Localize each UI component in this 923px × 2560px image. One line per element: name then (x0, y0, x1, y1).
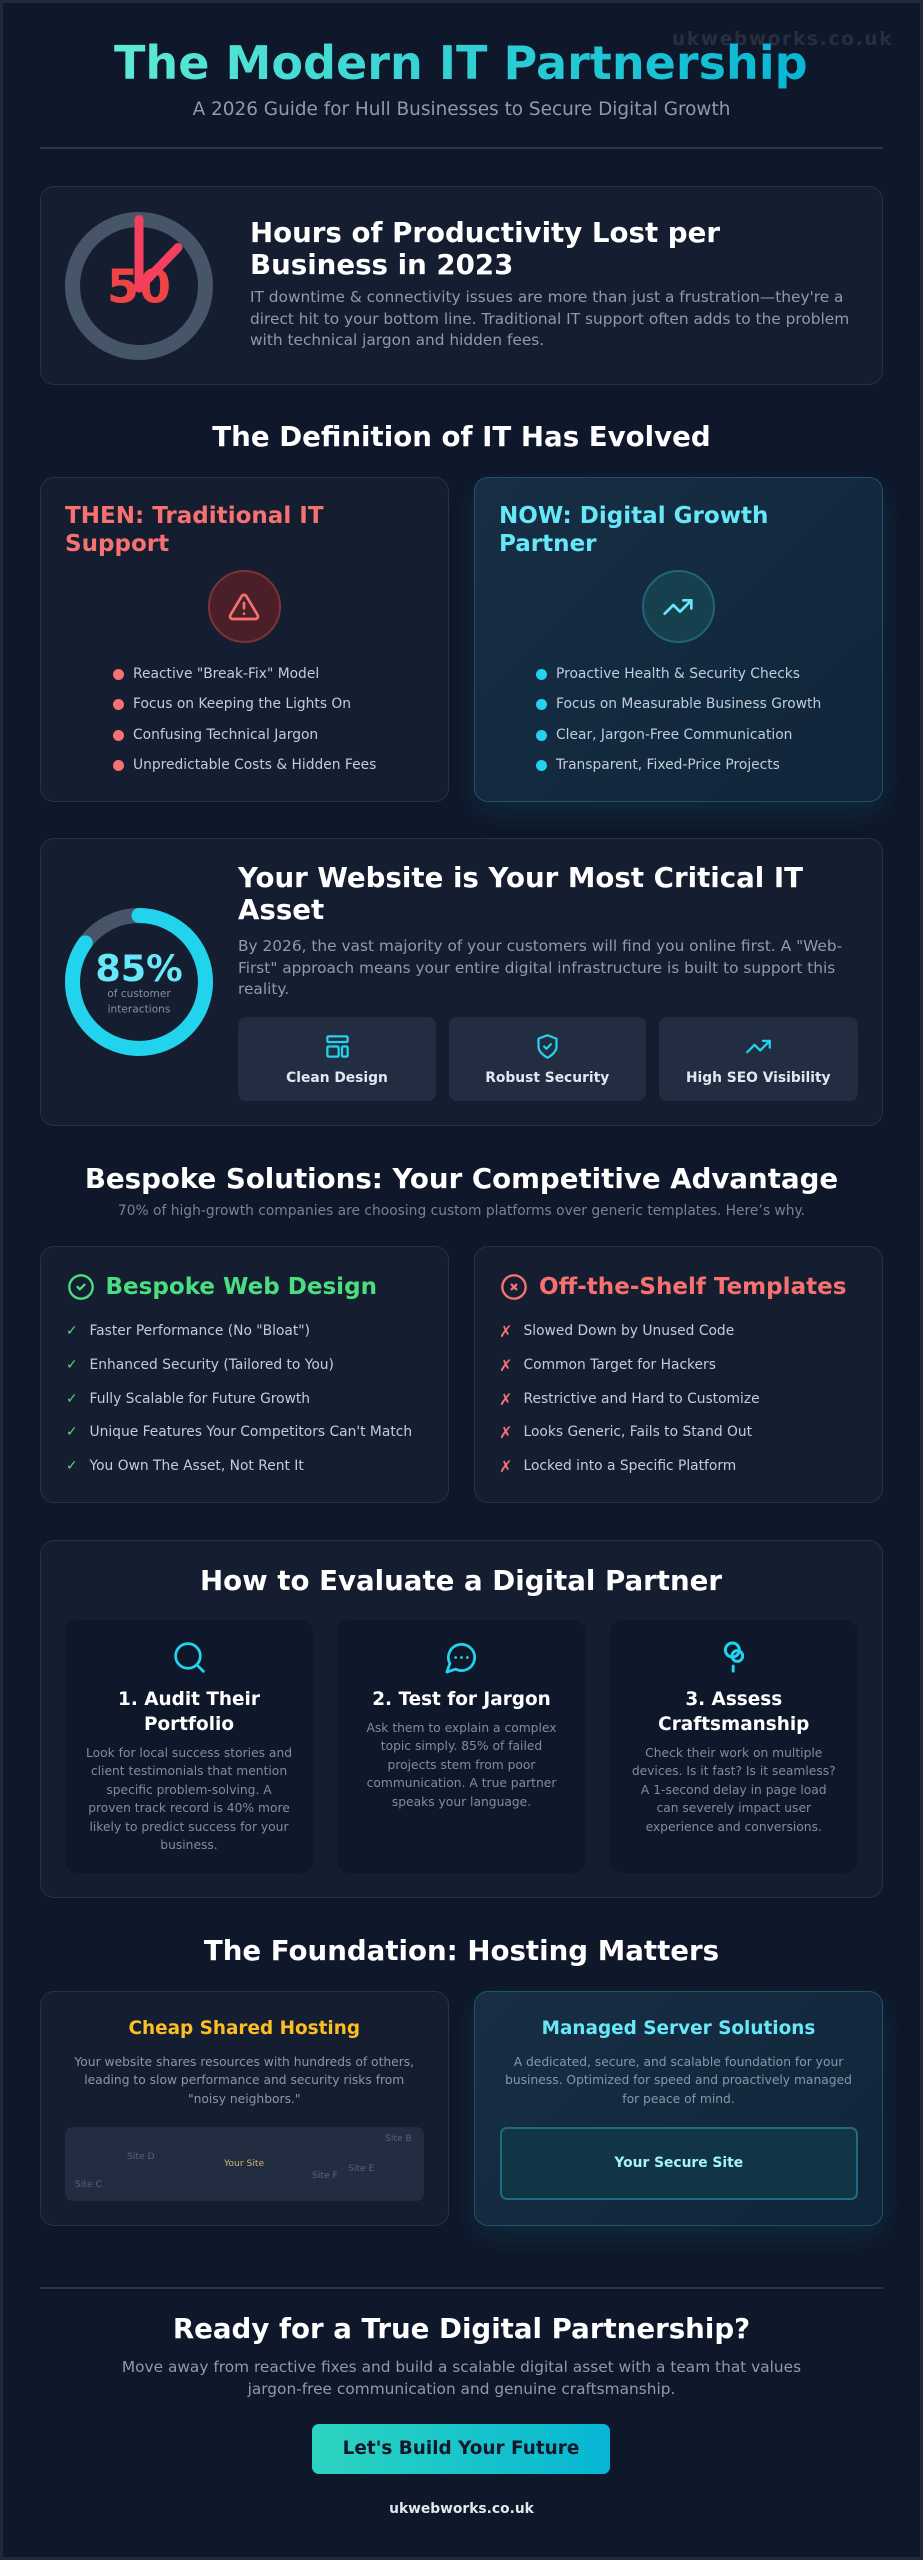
donut chart: 85%: interactions (108, 1004, 170, 1016)
list: benefits: ✓ (66, 1458, 78, 1474)
step 1: audit (65, 1620, 313, 1873)
step 3: craftsmanship: 3. Assess (685, 1689, 782, 1710)
diagram: secure site (500, 2127, 858, 2200)
panel heading (65, 503, 324, 557)
donut chart: 85% (65, 908, 213, 1056)
text block: By 2026, the vast majority of your customers will find you online first. A "Web- (238, 937, 842, 955)
diagram: shared server: Site D (127, 2151, 155, 2162)
button: Let's Build Your Future (343, 2438, 579, 2459)
panel heading: Cheap Shared Hosting (128, 2018, 360, 2039)
icon: x circle (501, 1274, 527, 1300)
heading: Business in 2023 (250, 248, 513, 280)
panel heading: Partner (499, 531, 597, 557)
panel: managed server (474, 1991, 883, 2226)
step 3: craftsmanship: A 1-second delay in page load (641, 1783, 827, 1797)
list: now: Focus on Measurable Business Growth (556, 696, 821, 712)
feature: SEO visibility: High SEO Visibility (686, 1070, 831, 1086)
panel heading: Bespoke Web Design (106, 1274, 377, 1300)
text block: call to action: jargon-free communication and genuine craftsmanship. (248, 2380, 675, 2398)
list: benefits: Enhanced Security (Tailored to You) (90, 1357, 334, 1373)
panel: now (474, 477, 883, 802)
diagram: shared server: Site E (348, 2163, 374, 2174)
step 3: craftsmanship: experience and conversions. (646, 1820, 822, 1834)
list: now: Transparent, Fixed-Price Projects (556, 757, 780, 773)
panel heading: Off-the-Shelf Templates (539, 1274, 846, 1300)
step 2: jargon: communication. A true partner (367, 1776, 556, 1790)
heading: definition: The Definition of IT Has Evolved (212, 420, 711, 452)
heading: call to action: Ready for a True Digital Partnership? (173, 2312, 750, 2345)
list: now (536, 666, 821, 773)
list: drawbacks: Locked into a Specific Platform (524, 1458, 736, 1474)
step 1: audit: client testimonials that mention (91, 1764, 287, 1778)
heading (238, 861, 803, 926)
text block (250, 288, 849, 349)
panel: website asset (40, 838, 883, 1126)
icon: trending up (642, 570, 714, 643)
feature: clean design (238, 1017, 436, 1101)
panel: evaluate partner (40, 1540, 883, 1898)
panel heading: How to Evaluate a Digital Partner (200, 1564, 722, 1597)
list: drawbacks: ✗ (499, 1356, 512, 1375)
list: drawbacks: ✗ (499, 1390, 512, 1409)
list: then: Reactive "Break-Fix" Model (133, 666, 319, 682)
text block (74, 2055, 414, 2106)
text block: with technical jargon and hidden fees. (250, 331, 544, 349)
step 1: audit: business. (160, 1838, 218, 1852)
panel: hours lost (40, 186, 883, 385)
text block: IT downtime & connectivity issues are more than just a frustration—they're a (250, 288, 843, 306)
list: drawbacks: ✗ (499, 1423, 512, 1442)
step 2: jargon: topic simply. 85% of failed (381, 1739, 542, 1753)
gauge: 50 hours clock (65, 212, 213, 360)
list: benefits (66, 1323, 412, 1474)
text block: "noisy neighbors." (188, 2092, 301, 2106)
donut chart: 85%: of customer (107, 988, 171, 1000)
text block: First" approach means your entire digital infrastructure is built to support this (238, 959, 835, 977)
list: benefits: ✓ (66, 1391, 78, 1407)
heading: bespoke: Bespoke Solutions: Your Competitive Advantage (85, 1162, 838, 1194)
feature: SEO visibility (659, 1017, 858, 1101)
heading: Hours of Productivity Lost per (250, 216, 720, 249)
heading: Your Website is Your Most Critical IT (238, 861, 803, 894)
step 3: craftsmanship: devices. Is it fast? Is it seamless? (632, 1764, 836, 1778)
text block: A dedicated, secure, and scalable foundation for your (514, 2055, 843, 2069)
diagram: shared server: Site F (312, 2170, 338, 2181)
list: then: Unpredictable Costs & Hidden Fees (133, 757, 376, 773)
section subtitle: 70% of high-growth companies are choosing custom platforms over generic templates. Here’s why. (118, 1203, 805, 1219)
text block: call to action: Move away from reactive fixes and build a scalable digital asset with a team that values (122, 2358, 801, 2376)
list: benefits: Unique Features Your Competitors Can't Match (90, 1424, 412, 1440)
step 3: craftsmanship: can severely impact user (656, 1801, 811, 1815)
step 1: audit: 1. Audit Their (118, 1689, 260, 1710)
subtitle: A 2026 Guide for Hull Businesses to Secure Digital Growth (193, 99, 730, 120)
text block: direct hit to your bottom line. Traditional IT support often adds to the problem (250, 310, 849, 328)
icon: check circle (68, 1274, 94, 1300)
list: then (113, 666, 376, 773)
watermark: ukwebworks.co.uk (672, 29, 893, 50)
text block: business. Optimized for speed and proactively managed (505, 2073, 852, 2087)
footer url: ukwebworks.co.uk (389, 2501, 534, 2517)
panel: shared hosting (40, 1991, 448, 2226)
step 2: jargon: Ask them to explain a complex (366, 1721, 556, 1735)
list: benefits: ✓ (66, 1357, 78, 1373)
text block: call to action (122, 2358, 801, 2398)
title: The Modern IT Partnership (114, 36, 808, 90)
text block: leading to slow performance and security risks from (84, 2073, 404, 2087)
feature: robust security (448, 1017, 646, 1101)
step 2: jargon: projects stem from poor (388, 1758, 535, 1772)
panel heading: Managed Server Solutions (542, 2018, 815, 2039)
step 1: audit: specific problem-solving. A (106, 1783, 272, 1797)
text block: Your website shares resources with hundreds of others, (74, 2055, 414, 2069)
feature: robust security: Robust Security (485, 1070, 609, 1086)
list: then: Confusing Technical Jargon (133, 727, 318, 743)
text block (505, 2055, 852, 2106)
step 2: jargon (337, 1620, 586, 1873)
list: benefits: ✓ (66, 1323, 78, 1339)
heading (250, 216, 720, 280)
text block: reality. (238, 980, 289, 998)
step 1: audit: likely to predict success for your (89, 1820, 289, 1834)
list: drawbacks: Looks Generic, Fails to Stand Out (524, 1424, 752, 1440)
step 1: audit: Portfolio (144, 1714, 234, 1735)
list: drawbacks: Restrictive and Hard to Customize (524, 1391, 760, 1407)
panel heading: Support (65, 531, 169, 557)
diagram: secure site: Your Secure Site (614, 2155, 743, 2171)
diagram: shared server: Your Site (224, 2158, 264, 2168)
step 3: craftsmanship (610, 1620, 858, 1873)
diagram: shared server: Site C (75, 2179, 102, 2190)
feature: clean design: Clean Design (286, 1070, 388, 1086)
list: then: Focus on Keeping the Lights On (133, 696, 351, 712)
gauge: 50 hours clock: 50 (107, 259, 171, 313)
list: drawbacks: ✗ (499, 1457, 512, 1476)
panel: then (40, 477, 448, 802)
diagram: shared server: Site B (385, 2133, 412, 2144)
panel heading: NOW: Digital Growth (499, 503, 768, 529)
text block: for peace of mind. (622, 2092, 735, 2106)
donut chart: 85%: 85% (95, 947, 183, 990)
list: drawbacks: ✗ (499, 1322, 512, 1341)
panel: bespoke web design (40, 1246, 448, 1503)
list: benefits: You Own The Asset, Not Rent It (90, 1458, 304, 1474)
step 3: craftsmanship: Craftsmanship (658, 1714, 809, 1735)
list: drawbacks: Slowed Down by Unused Code (524, 1323, 734, 1339)
step 1: audit: proven track record is 40% more (88, 1801, 290, 1815)
text block (238, 937, 842, 998)
step 2: jargon: speaks your language. (392, 1795, 531, 1809)
list: benefits: Fully Scalable for Future Growth (90, 1391, 310, 1407)
list: drawbacks (499, 1322, 760, 1476)
list: now: Clear, Jargon-Free Communication (556, 727, 792, 743)
panel heading: THEN: Traditional IT (65, 503, 324, 529)
list: drawbacks: Common Target for Hackers (524, 1357, 716, 1373)
step 2: jargon: 2. Test for Jargon (372, 1689, 551, 1710)
heading: hosting: The Foundation: Hosting Matters (204, 1934, 719, 1966)
button (312, 2424, 610, 2474)
list: now: Proactive Health & Security Checks (556, 666, 800, 682)
step 3: craftsmanship: Check their work on multiple (645, 1746, 822, 1760)
icon: warning (208, 570, 280, 643)
heading: Asset (238, 893, 324, 926)
panel: off-the-shelf templates (474, 1246, 883, 1503)
diagram: shared server (65, 2127, 424, 2201)
list: benefits: ✓ (66, 1424, 78, 1440)
list: benefits: Faster Performance (No "Bloat") (90, 1323, 310, 1339)
panel heading (499, 503, 768, 557)
step 1: audit: Look for local success stories and (86, 1746, 292, 1760)
